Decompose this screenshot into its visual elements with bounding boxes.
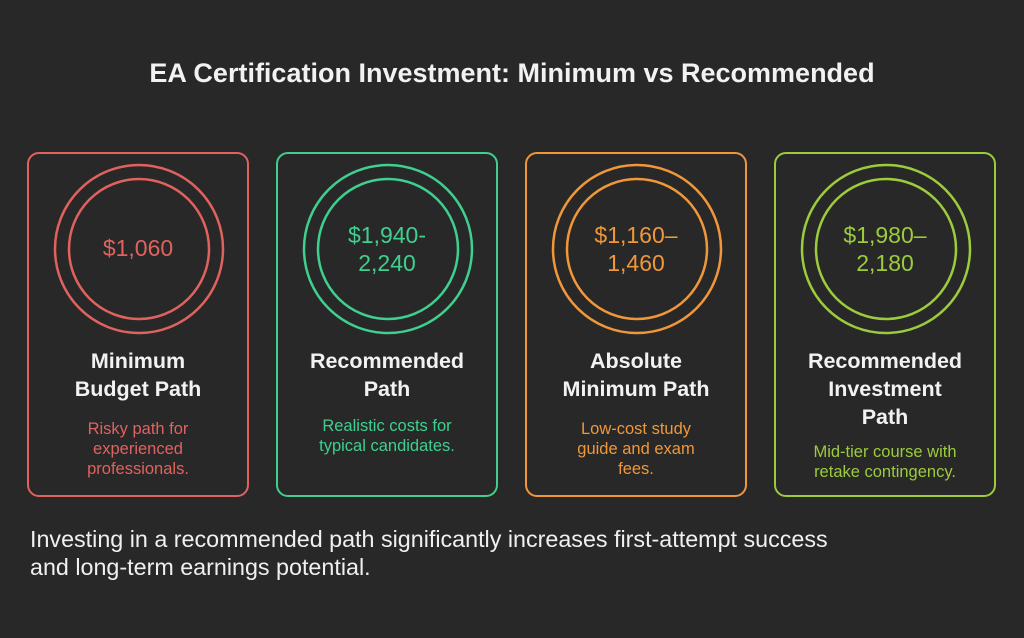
- description: Mid-tier course with retake contingency.: [813, 443, 957, 481]
- heading: Recommended: [310, 349, 464, 373]
- amount: $1,940-: [348, 222, 426, 248]
- icon: double circle: [552, 164, 722, 334]
- icon: double circle: [800, 164, 972, 334]
- heading: Minimum Path: [563, 377, 709, 401]
- heading: Recommended: [808, 349, 962, 373]
- heading: Investment: [828, 377, 942, 401]
- heading: [75, 349, 201, 401]
- title: EA Certification Investment: Minimum vs Recommended: [149, 58, 875, 88]
- amount: 2,240: [358, 250, 416, 276]
- heading: [808, 349, 962, 429]
- heading: Budget Path: [75, 377, 201, 401]
- icon: double circle: [302, 164, 474, 334]
- amount: 1,460: [607, 250, 665, 276]
- footer text: [30, 526, 828, 580]
- heading: [563, 349, 709, 401]
- panel: recommended investment path: [774, 152, 996, 497]
- heading: Minimum: [91, 349, 185, 373]
- heading: Path: [862, 405, 908, 429]
- description: Realistic costs for typical candidates.: [319, 417, 455, 455]
- amount: 2,180: [856, 250, 914, 276]
- description: Low-cost study guide and exam fees.: [577, 420, 695, 478]
- panel: recommended path: [276, 152, 498, 497]
- footer text: Investing in a recommended path significantly increases first-attempt success: [30, 526, 828, 552]
- amount: $1,060: [103, 235, 173, 261]
- icon: double circle: [54, 164, 224, 334]
- amount: [594, 222, 678, 276]
- panel: absolute minimum path: [525, 152, 747, 497]
- heading: Absolute: [590, 349, 682, 373]
- amount: $1,980–: [843, 222, 927, 248]
- amount: [843, 222, 927, 276]
- heading: Path: [364, 377, 410, 401]
- description: Risky path for experienced professionals.: [87, 420, 189, 478]
- amount: [348, 222, 426, 276]
- footer text: and long-term earnings potential.: [30, 554, 371, 580]
- amount: $1,160–: [594, 222, 678, 248]
- heading: [310, 349, 464, 401]
- panel: minimum budget path: [27, 152, 249, 497]
